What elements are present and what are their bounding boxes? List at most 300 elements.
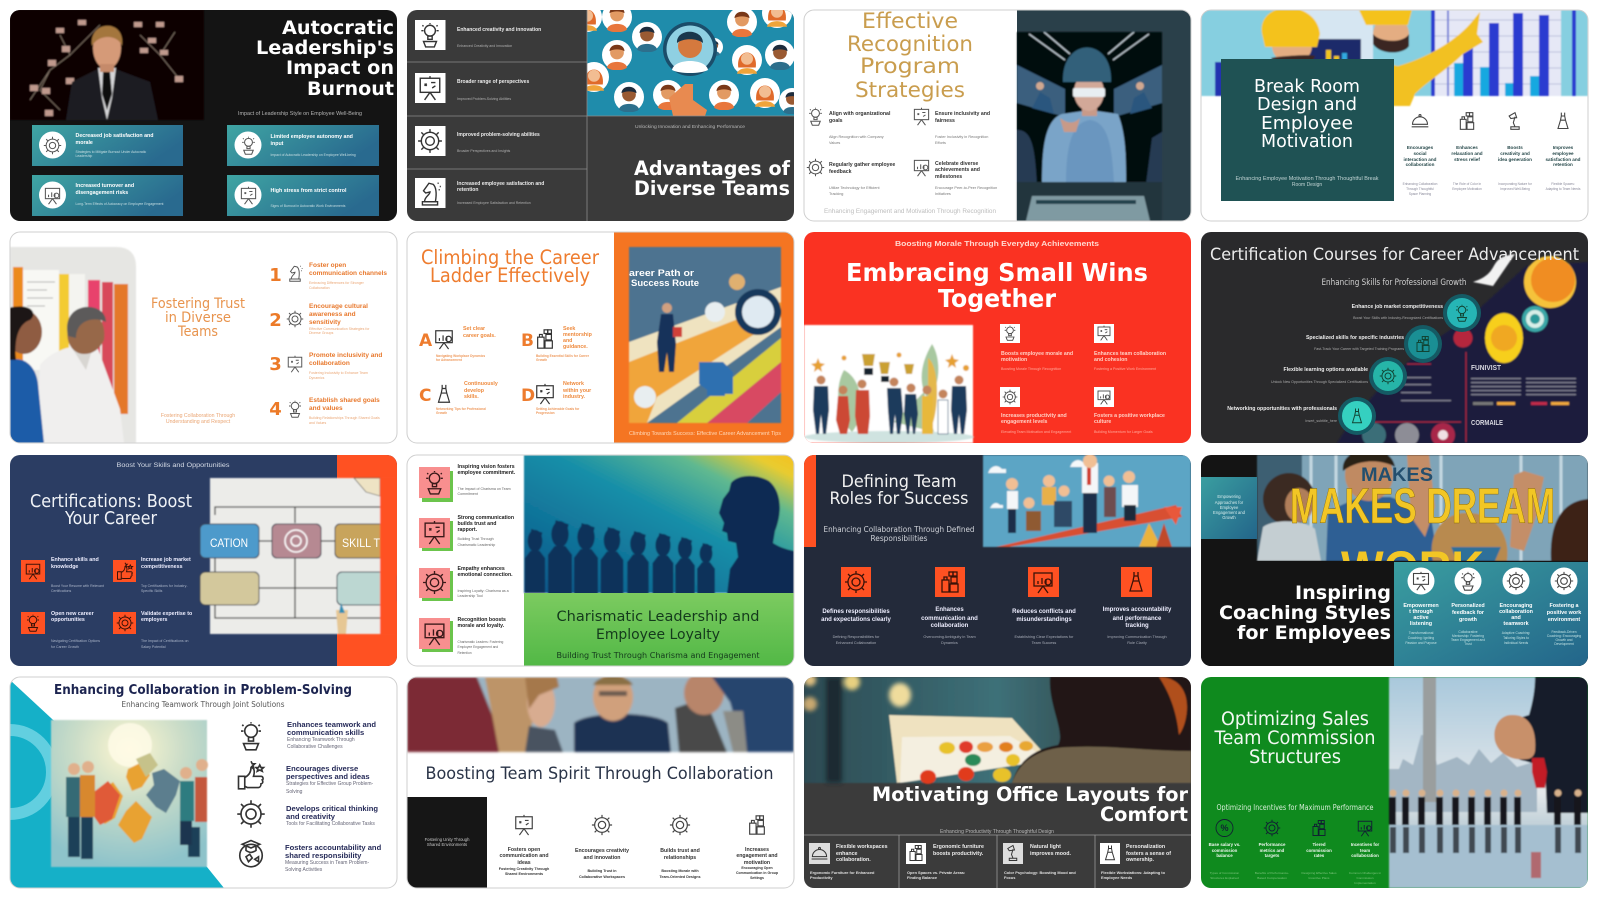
title panel: Employee Loyalty (596, 627, 720, 643)
title (634, 160, 790, 196)
card: decreased job satisfaction: morale (76, 140, 93, 146)
title panel: Charismatic Leadership and (556, 609, 760, 625)
subtitle: Enhancing Skills for Professional Growth (1322, 278, 1466, 288)
item A: for Advancement (436, 358, 463, 362)
item: engagement: Settings (750, 876, 764, 880)
item: engagement: Increases (745, 847, 769, 853)
photo: team high five (1257, 449, 1588, 561)
item: networking (1227, 397, 1376, 435)
style: feedback: Mentorship: Fostering (1452, 634, 1484, 638)
column: natural light (1003, 843, 1076, 880)
item: opportunities: Open new career (51, 611, 94, 617)
item: competitiveness: Top Certifications for Industry- (141, 584, 188, 588)
item: communication: Overcoming Ambiguity in Team (923, 635, 976, 639)
style: teamwork: teamwork (1503, 621, 1529, 627)
benefit: relaxation: The Role of Color in (1453, 182, 1481, 186)
subtitle: Optimizing Incentives for Maximum Performance (1216, 803, 1374, 812)
title (421, 246, 600, 287)
step 2: sensitivity (309, 319, 341, 326)
title: Roles for Success (830, 489, 968, 508)
benefit: satisfaction: employee (1552, 151, 1574, 156)
item: morale: motivation (1001, 357, 1027, 363)
side subtitle: Approaches for (1215, 500, 1244, 505)
item: specialized skills: Specialized skills for specific industries (1306, 335, 1404, 341)
column: workspaces: Ergonomic Furniture for Enhanced (810, 870, 874, 875)
item: productivity: engagement levels (1001, 419, 1048, 425)
item B (521, 326, 593, 362)
benefit: creativity (1498, 113, 1533, 191)
benefit: satisfaction (1546, 113, 1581, 191)
column: furniture: Open Spaces vs. Private Areas: (907, 870, 965, 875)
title: Boosting Team Spirit Through Collaboration (426, 764, 774, 783)
slide: Embracing Small Wins Together (804, 232, 1191, 443)
item: vision: The Impact of Charisma on Team (458, 487, 511, 491)
benefit: relaxation: Enhances (1456, 145, 1478, 150)
row: problem solving (415, 126, 540, 156)
title: Structures (1249, 747, 1341, 768)
title (1214, 709, 1376, 768)
item: opportunities: Navigating Certification Options (51, 639, 100, 643)
item: base salary: Base salary vs. (1209, 842, 1240, 847)
item: metrics: Benefits of Performance- (1255, 871, 1289, 875)
column: personalization: ownership. (1126, 857, 1154, 863)
side subtitle: Growth (1222, 515, 1236, 520)
item: trust: Team-Oriented Designs (659, 875, 701, 879)
illustration: diverse faces (587, 10, 794, 116)
step 4: 4 (269, 399, 282, 420)
item: base salary: Types of Commission (1210, 871, 1239, 875)
side subtitle: Employee (1220, 505, 1239, 510)
item B: Growth (536, 358, 547, 362)
title: Impact on (286, 58, 394, 79)
item: skills: knowledge (51, 564, 78, 570)
benefit: social interaction: interaction and (1404, 157, 1437, 162)
side subtitle: Fostering Unity Through (425, 837, 469, 842)
item: specialized skills: Fast-Track Your Career with Targeted Training Programs (1314, 347, 1404, 351)
slide: Fostering Trust in Diverse Teams (6, 232, 397, 443)
photo: businessman with org chart (10, 10, 204, 120)
step 4: Establish shared goals (309, 397, 380, 404)
item: teamwork: communication skills (287, 728, 364, 737)
column: furniture (906, 843, 984, 880)
item: team incentives: collaboration (1351, 853, 1379, 858)
item: open communication (499, 815, 550, 876)
item B: guidance. (563, 344, 588, 350)
column: workspaces: Flexible workspaces (836, 844, 888, 850)
item: expertise: Validate expertise to (141, 611, 192, 617)
step 2 (269, 303, 370, 335)
title: Climbing the Career (421, 246, 600, 269)
item A (419, 326, 496, 362)
item: morale: Boosts employee morale and (1001, 351, 1073, 357)
slide: Break Room Design and Employee Motivation (1201, 8, 1588, 221)
title: Optimizing Sales (1221, 709, 1369, 730)
image: team joining puzzle pieces (51, 720, 208, 867)
title: Motivating Office Layouts for (872, 783, 1188, 806)
mask below photo (1201, 561, 1588, 666)
item: teamwork: Enhancing Teamwork Through (287, 737, 355, 743)
item: milestones: Encourage Peer-to-Peer Recognition (935, 186, 997, 190)
row: problem solving: Broader Perspectives and Insights (457, 149, 511, 153)
card: turnover: disengagement risks (76, 190, 128, 196)
slide: Boosting Team Spirit Through Collaboration (407, 671, 794, 888)
item: accountability: tracking (1125, 623, 1149, 629)
card: decreased job satisfaction: Decreased job satisfaction and (76, 133, 154, 139)
column: personalization: fosters a sense of (1126, 851, 1171, 857)
row: satisfaction: Increased Employee Satisfaction and Retention (457, 201, 531, 205)
style: environment: Feedback-Driven (1551, 630, 1577, 634)
item: accountability: Improves accountability (1103, 607, 1171, 613)
title panel: Enhancing Employee Motivation Through Thoughtful Break (1236, 176, 1379, 182)
item D: industry. (563, 394, 586, 400)
title panel (1221, 59, 1394, 201)
benefit: satisfaction: Adapting to Team Needs (1546, 187, 1581, 191)
step 3: 3 (269, 354, 282, 375)
title (30, 492, 192, 529)
step 2: 2 (269, 310, 282, 331)
style: teamwork: collaboration (1499, 609, 1533, 615)
title: Teams (177, 324, 218, 340)
subtitle: Responsibilities (870, 534, 928, 543)
item: conflicts: Reduces conflicts and (1012, 609, 1076, 615)
image labels: SKILL T (342, 536, 381, 550)
style: feedback: feedback for (1452, 610, 1485, 616)
title: Advantages of (634, 157, 790, 180)
row: perspectives: Broader range of perspectives (457, 79, 529, 85)
subtitle: Fostering Collaboration Through (161, 413, 235, 419)
style: teamwork: Encouraging (1500, 603, 1532, 609)
item: team incentives: Implementation (1354, 881, 1376, 885)
item: accountability (1103, 567, 1172, 645)
illustration: team on rising arrow (983, 454, 1191, 547)
title (830, 472, 968, 508)
photo: hand selecting red figurine (1389, 677, 1588, 888)
title panel: Building Trust Through Charisma and Engagement (556, 651, 760, 660)
subtitle (824, 525, 975, 543)
item: perspectives: Solving (286, 789, 303, 795)
item: empathy: Leadership Tool (458, 594, 483, 598)
item: specialized skills (1306, 325, 1442, 363)
item: communication: builds trust and (458, 521, 496, 527)
item: communication: Charismatic Leadership (458, 543, 495, 547)
title panel: Motivation (1261, 131, 1353, 152)
footer: Climbing Towards Success: Effective Career Advancement Tips (629, 431, 781, 437)
item: job market: Enhance job market competitiveness (1352, 304, 1443, 310)
style: listening (1403, 568, 1439, 645)
item: tiered rates: Incentive Plans (1309, 876, 1330, 880)
style: teamwork: and (1511, 615, 1521, 621)
row: problem solving: Improved problem-solving abilities (457, 132, 540, 138)
item: critical thinking: Develops critical thinking (286, 804, 378, 813)
item: feedback (807, 159, 895, 196)
item: communication: Strong communication (458, 515, 514, 521)
item D: within your (562, 388, 591, 394)
item: empathy: Empathy enhances (458, 566, 505, 572)
item: competitiveness: competitiveness (141, 564, 183, 570)
side subtitle (1201, 477, 1257, 539)
item B: mentorship (563, 332, 593, 338)
title: in Diverse (165, 310, 231, 326)
item: productivity: Increases productivity and (1001, 413, 1067, 419)
item: metrics (1255, 820, 1289, 880)
step 4: and Values (309, 421, 327, 425)
column: furniture: Finding Balance (907, 875, 938, 880)
item C: Networking Tips for Professional (436, 407, 486, 411)
photo lettering (1290, 465, 1555, 597)
item: communication: Building Trust Through (458, 537, 494, 541)
step 4: and values (309, 405, 343, 412)
item: flexible learning (1271, 357, 1407, 395)
step 3: Promote inclusivity and (309, 352, 382, 359)
illustration: team celebrating with trophies (804, 325, 974, 443)
item: teamwork: Collaborative Challenges (287, 744, 343, 750)
panel: coaching styles (1394, 562, 1588, 666)
item: inclusivity: Ensure inclusivity and (935, 111, 990, 117)
card: high stress: High stress from strict control (270, 188, 347, 194)
item: feedback: Utilize Technology for Efficient (829, 186, 880, 190)
title: Coaching Styles (1219, 602, 1391, 624)
benefit: social interaction: Encourages (1407, 145, 1433, 150)
style: teamwork: Adaptive Coaching: (1502, 631, 1530, 635)
style: listening: active (1413, 615, 1429, 621)
item: accountability: Measuring Success in Team Problem- (285, 860, 369, 866)
item B: Seek (563, 326, 575, 332)
item: perspectives: perspectives and ideas (286, 772, 370, 781)
item: feedback: Tracking (829, 192, 843, 196)
title: Defining Team (842, 472, 956, 491)
item B: and (563, 338, 572, 344)
item: culture: Building Momentum for Larger Goals (1094, 430, 1153, 434)
style: environment: Fostering a (1549, 603, 1579, 609)
step 3: Fostering Inclusivity to Enhance Team (309, 371, 368, 375)
item: teamwork (241, 720, 376, 750)
column: furniture: boosts productivity. (933, 851, 984, 857)
item: inclusivity: Foster Inclusivity in Recognition (935, 135, 988, 139)
item: critical thinking (237, 800, 378, 828)
title: Certification Courses for Career Advancement (1210, 245, 1580, 264)
row: creativity (415, 20, 541, 50)
slide: Certification Courses for Career Advancement (1201, 232, 1588, 447)
slide: Motivating Office Layouts for Comfort (803, 674, 1191, 888)
item: metrics: targets (1265, 853, 1280, 858)
item: base salary: % (1220, 823, 1229, 833)
style: listening: Empowermen (1403, 603, 1439, 609)
slide: Charismatic Leadership and Employee Loyalty (407, 455, 794, 666)
column: workspaces (809, 843, 888, 880)
slide: Defining Team Roles for Success (804, 454, 1191, 666)
style: teamwork: Tailoring Styles to (1503, 636, 1529, 640)
column: natural light: Color Psychology: Boosting Mood and (1004, 870, 1076, 875)
item B: Building Essential Skills for Career (536, 354, 589, 358)
benefit: social interaction: Enhancing Collaboration (1403, 182, 1437, 186)
illustration caption: Success Route (631, 278, 699, 289)
title: for Employees (1237, 622, 1391, 644)
title (846, 258, 1148, 313)
benefit: satisfaction: satisfaction and (1546, 157, 1581, 162)
item: culture (1094, 387, 1165, 434)
title: Together (938, 284, 1057, 313)
image: flowchart on paper (200, 478, 397, 634)
style: feedback: Trust (1464, 642, 1472, 646)
column: workspaces: Productivity (810, 875, 833, 880)
item: open communication: ideas (517, 860, 531, 866)
benefit: relaxation: stress relief (1454, 157, 1480, 162)
item: accountability: Improving Communication Through (1107, 635, 1167, 639)
item: communication: Enhances (935, 607, 964, 613)
title: Inspiring (1295, 582, 1391, 604)
collage headings (1471, 365, 1503, 427)
side subtitle: Engagement and (1213, 510, 1246, 515)
slide: Certifications: Boost Your Career (10, 455, 397, 666)
item: perspectives (238, 761, 374, 795)
item: communication: rapport. (458, 527, 478, 533)
column: personalization: Employee Needs (1101, 875, 1132, 880)
title: Diverse Teams (634, 177, 790, 200)
item: opportunities: opportunities (51, 617, 85, 623)
item: base salary: Structures Explained (1210, 876, 1239, 880)
item: skills: Boost Your Resume with Relevant (51, 584, 104, 588)
step 2: awareness and (309, 311, 356, 318)
item: milestones: Initiatives (935, 192, 951, 196)
item: accountability: and performance (1113, 616, 1162, 622)
item: tiered rates: commission (1306, 848, 1332, 853)
item: communication: communication and (921, 616, 978, 622)
side subtitle: Empowering (1217, 494, 1241, 499)
item: defines: Enhanced Collaboration (836, 641, 876, 645)
card: limited autonomy: input (270, 141, 284, 147)
card: turnover: Long-Term Effects of Autocracy on Employee Engagement (76, 202, 164, 206)
item: networking: Insert_subtitle_here (1305, 419, 1337, 423)
step 1: 1 (269, 265, 282, 286)
image: leader addressing silhouettes (524, 455, 794, 603)
item: align: Values (829, 141, 840, 145)
title panel: Design and (1257, 94, 1357, 115)
item A: Navigating Workplace Dynamics (436, 354, 485, 358)
style: feedback (1451, 568, 1485, 646)
card: limited autonomy: Impact of Autocratic Leadership on Employee Well-being (270, 153, 356, 157)
side subtitle (407, 797, 487, 888)
step 1: Foster open (309, 262, 346, 269)
item: culture: culture (1094, 419, 1111, 425)
item: engagement: Encouraging Open (741, 866, 773, 870)
item: recognition: Charismatic Leaders: Fostering (458, 640, 503, 644)
row: perspectives: Improved Problem-Solving Abilities (457, 97, 511, 101)
column: personalization: Flexible Workstations: Adapting to (1101, 870, 1165, 875)
step 1 (269, 262, 387, 290)
item: culture: Fosters a positive workplace (1094, 413, 1165, 419)
title: Comfort (1100, 803, 1188, 826)
title panel: Employee (1261, 113, 1353, 134)
item: communication: Dynamics (941, 641, 958, 645)
step 2: Encourage cultural (309, 303, 368, 310)
item: conflicts: Team Success (1032, 641, 1056, 645)
item: engagement (736, 816, 778, 880)
benefit: creativity: Improved Well-Being (1500, 187, 1530, 191)
item: job market (1352, 294, 1481, 332)
eyebrow: Boosting Morale Through Everyday Achievements (895, 239, 1099, 248)
title: Burnout (307, 79, 394, 100)
style: listening: t through (1409, 609, 1433, 615)
row: satisfaction: Increased employee satisfaction and (457, 181, 544, 187)
style: feedback: Collaborative (1458, 630, 1478, 634)
style: teamwork (1499, 568, 1533, 645)
item: accountability: Solving Activities (285, 867, 323, 873)
item: feedback: Regularly gather employee (829, 162, 895, 168)
benefit: satisfaction: retention (1553, 162, 1573, 167)
item: inclusivity: Efforts (935, 141, 946, 145)
teal background shape (10, 680, 224, 888)
step 4: Building Relationships Through Shared Goals (309, 416, 380, 420)
item: align: Align with organizational (829, 111, 890, 117)
item: engagement: Communication in Group (736, 871, 778, 875)
style: environment: environment (1548, 617, 1580, 623)
item A: career goals. (463, 333, 496, 339)
item: accountability: Role Clarity (1127, 641, 1147, 645)
card: turnover: Increased turnover and (76, 183, 134, 189)
title (847, 9, 973, 102)
row: satisfaction: retention (457, 187, 478, 193)
slide: Enhancing Collaboration in Problem-Solving (0, 677, 397, 888)
item: open communication: communication and (500, 853, 548, 859)
item: empathy: Inspiring Loyalty: Charisma as a (458, 589, 509, 593)
photo: colleagues at wall board (6, 247, 136, 443)
column: personalization: Personalization (1126, 844, 1165, 850)
item C (419, 381, 498, 415)
item: align (809, 108, 891, 145)
item: open communication: Shared Environments (505, 872, 543, 876)
benefit: social interaction (1403, 115, 1438, 196)
card: decreased job satisfaction: Strategies to Mitigate Burnout Under Autocratic (76, 150, 146, 154)
title panel: Break Room (1254, 76, 1360, 97)
item: morale: Boosting Morale Through Recognition (1001, 367, 1061, 371)
item: creativity (575, 815, 629, 879)
title panel (524, 593, 794, 666)
item D: Progression (536, 411, 555, 415)
item C: skills. (464, 394, 479, 400)
item: tiered rates: Tiered (1312, 842, 1326, 847)
footer subtitle: Enhancing Engagement and Motivation Through Recognition (824, 209, 996, 215)
title (256, 18, 394, 100)
illustration: workers and bar chart (1201, 8, 1588, 106)
title panel: Room Design (1292, 182, 1322, 188)
step 1: communication channels (309, 270, 387, 277)
style: teamwork: Individual Needs (1504, 641, 1529, 645)
column: personalization (1100, 843, 1171, 880)
item: team incentives: Incentives for (1351, 842, 1379, 847)
title: Recognition (847, 32, 973, 56)
item: productivity (1000, 387, 1071, 434)
item: accountability (240, 840, 382, 873)
subtitle: Enhancing Teamwork Through Joint Solutions (122, 700, 285, 709)
photo: colleagues collaborating (407, 671, 794, 752)
title: Embracing Small Wins (846, 258, 1148, 287)
benefit: creativity: creativity and (1500, 151, 1530, 156)
item D: D (521, 386, 535, 406)
item: collaboration: and cohesion (1094, 357, 1127, 363)
style: listening: Passion and Purpose (1405, 641, 1437, 645)
item: team incentives: Commission (1356, 876, 1374, 880)
style: feedback: Personalized (1451, 603, 1485, 609)
item: creativity: Encourages creativity (575, 848, 629, 854)
title: Your Career (64, 509, 158, 529)
item D: Setting Achievable Goals for (536, 407, 579, 411)
benefit: relaxation: relaxation and (1451, 151, 1483, 156)
collage headings: FUNIVIST (1471, 365, 1502, 372)
item: tiered rates: Designing Effective Sales (1301, 871, 1337, 875)
title: Strategies (855, 78, 965, 102)
style: listening: Coaching: Igniting (1408, 636, 1434, 640)
item: feedback: feedback (829, 169, 852, 175)
